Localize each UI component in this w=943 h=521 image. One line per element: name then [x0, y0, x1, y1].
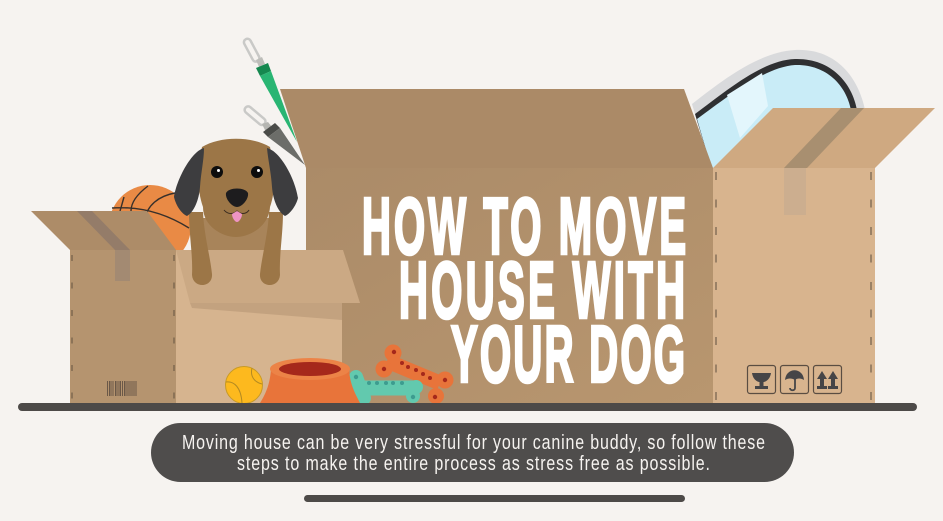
- mirror: [692, 50, 865, 170]
- grey leash: [243, 105, 305, 165]
- dog: [174, 139, 298, 285]
- dog bowl: [260, 358, 360, 403]
- dog left ear: [174, 148, 204, 216]
- dog mouth: [224, 210, 249, 214]
- dog head: [198, 139, 274, 237]
- orange bone toy: [376, 344, 454, 404]
- title: [362, 183, 686, 399]
- title: HOUSE WITH: [399, 247, 685, 335]
- dog right ear: [267, 148, 298, 216]
- basketball: [112, 185, 190, 250]
- dog right leg: [260, 212, 283, 285]
- teal bone toy: [354, 375, 423, 403]
- ground line: [18, 403, 917, 411]
- middle box: [176, 250, 360, 403]
- icon: umbrella: [780, 366, 808, 394]
- dog left leg: [189, 212, 212, 285]
- barcode: [108, 381, 136, 396]
- intro text pill: [151, 423, 794, 482]
- big box: [280, 89, 713, 403]
- handling icons: [748, 366, 842, 394]
- intro text pill: steps to make the entire process as stress free as possible.: [237, 452, 710, 474]
- tennis ball: [226, 366, 262, 404]
- intro text pill: Moving house can be very stressful for your canine buddy, so follow these: [182, 431, 765, 453]
- green leash: [243, 38, 297, 142]
- dog nose: [226, 188, 248, 207]
- icon: fragile glass: [748, 366, 776, 394]
- icon: this way up arrows: [814, 366, 842, 394]
- dog chest: [197, 218, 276, 250]
- dog eyes: [211, 166, 263, 178]
- title: YOUR DOG: [451, 311, 685, 399]
- title: HOW TO MOVE: [362, 183, 686, 271]
- dog tongue: [232, 211, 242, 222]
- right box: [713, 108, 935, 403]
- small box: [31, 211, 176, 403]
- bottom divider bar: [304, 495, 685, 502]
